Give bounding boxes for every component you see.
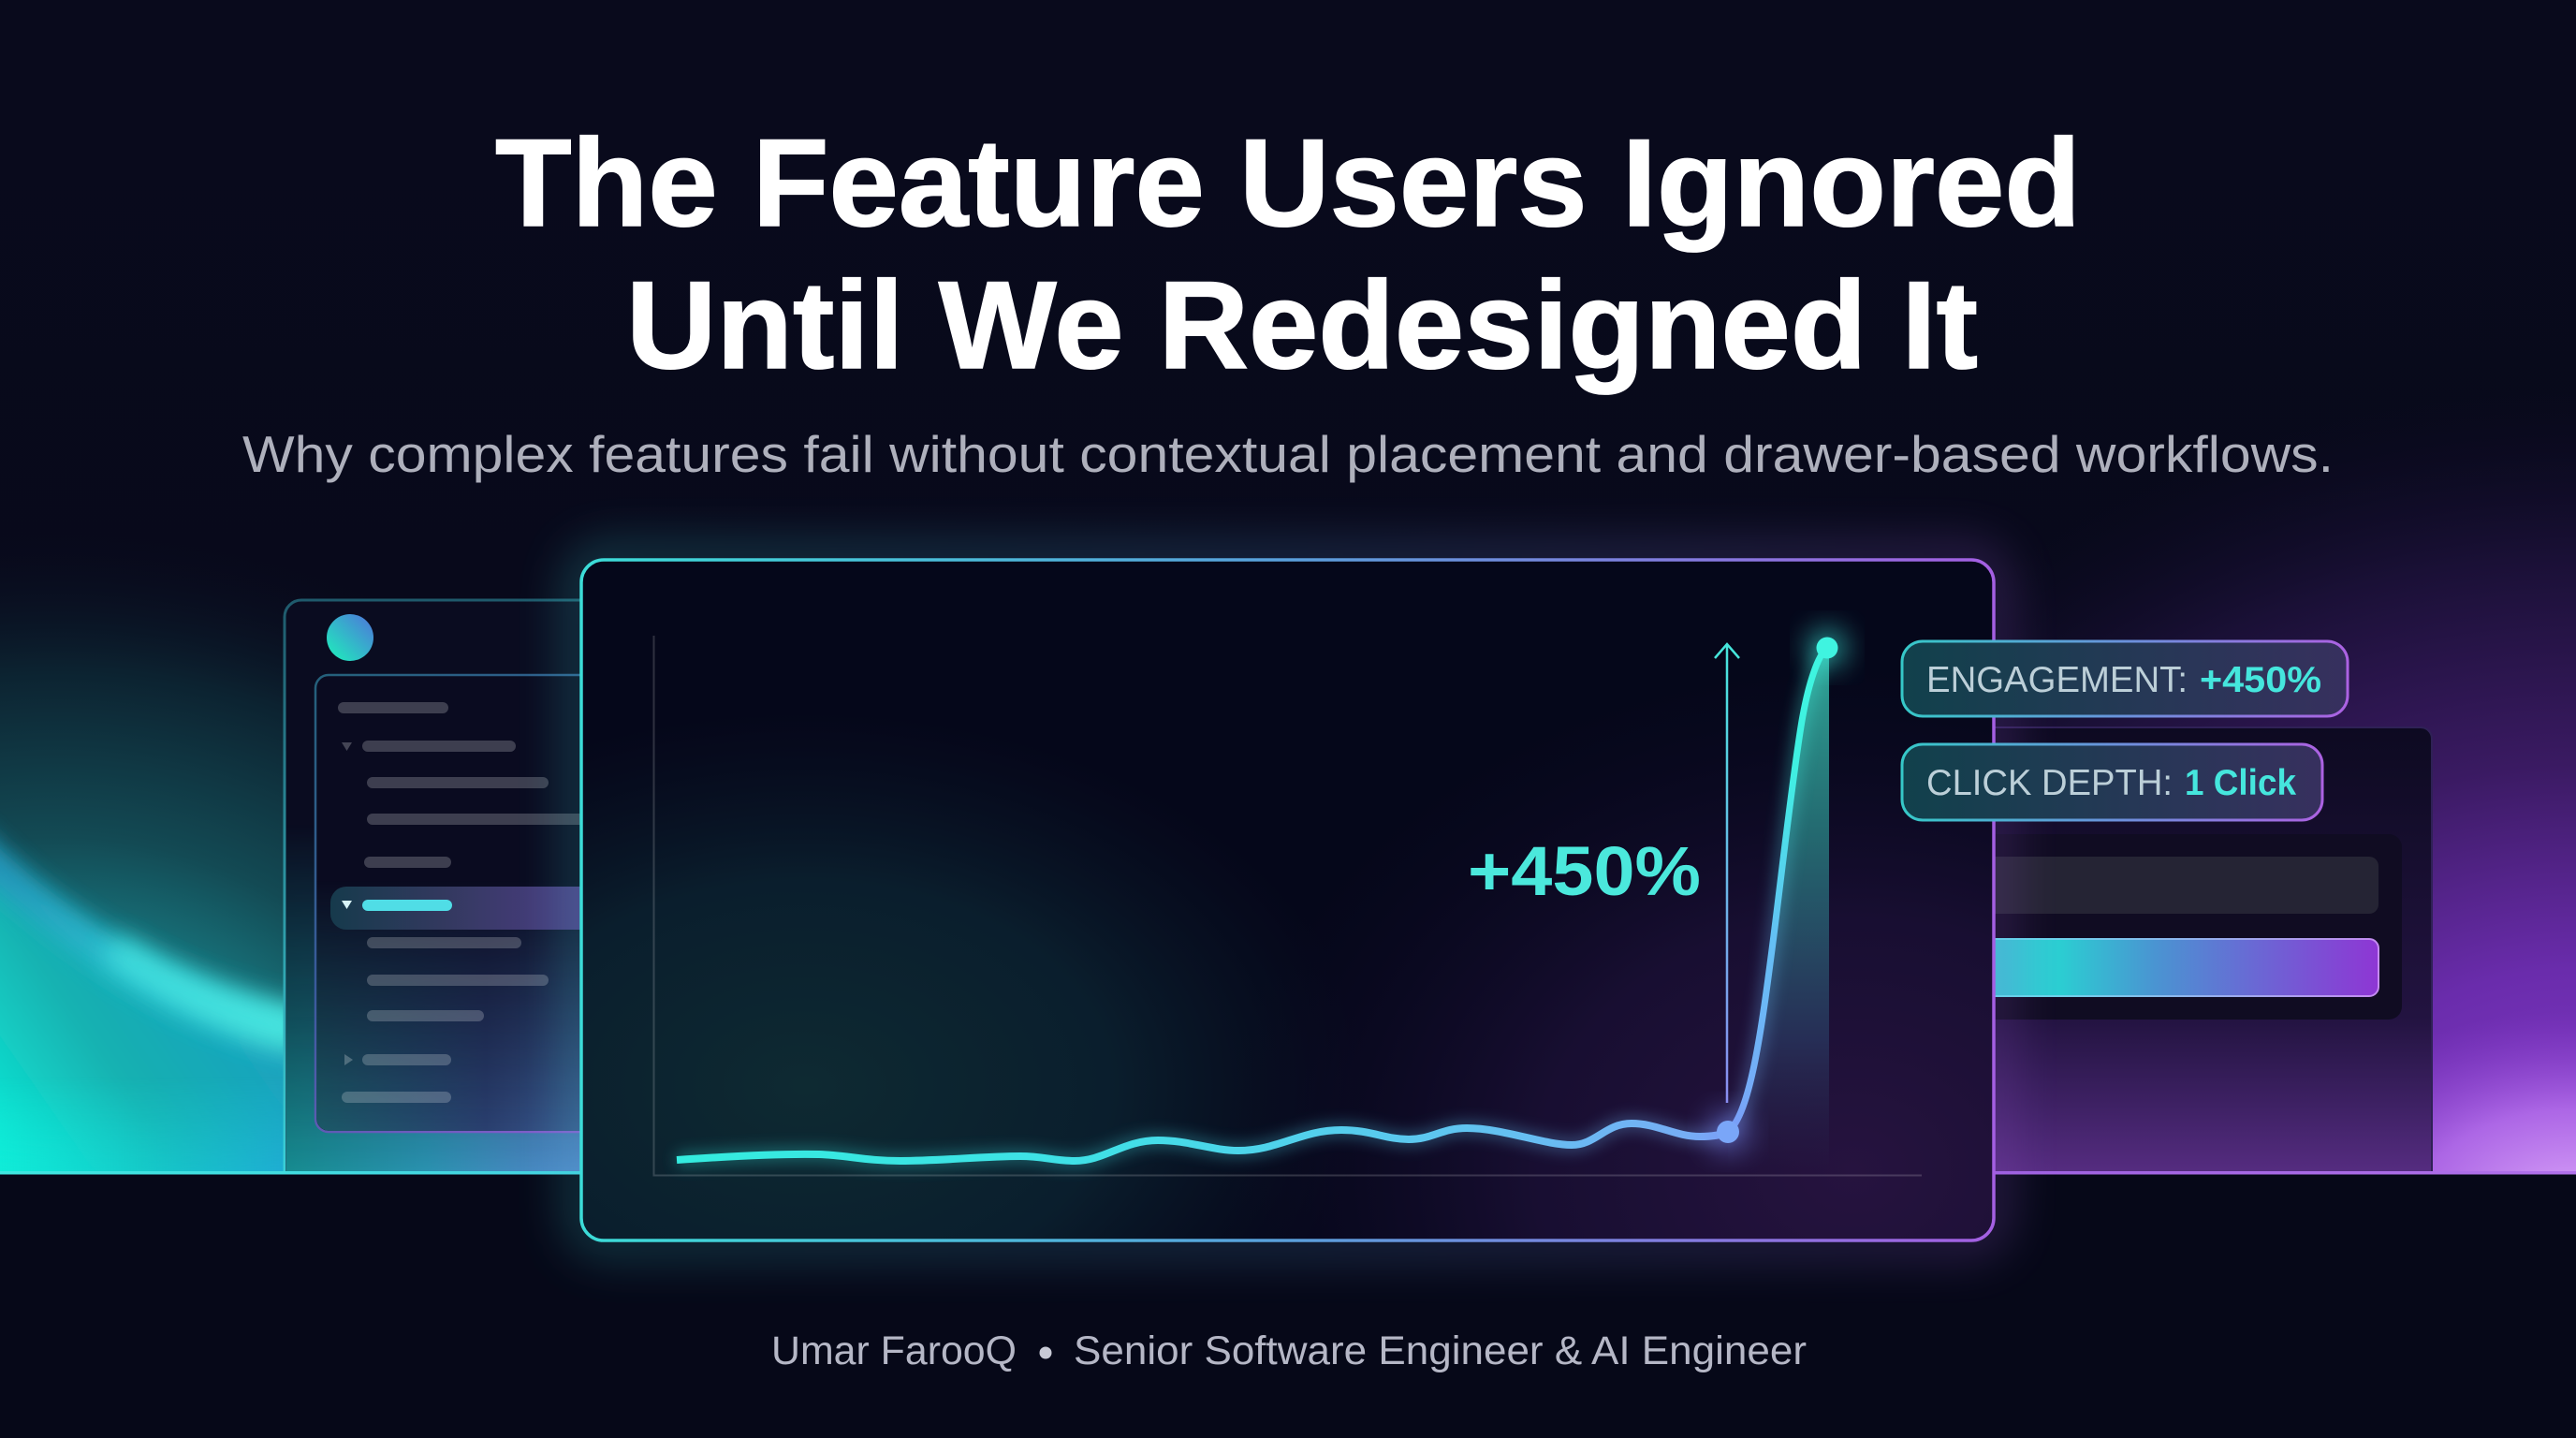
subtitle: Why complex features fail without contextual placement and drawer-based workflows. [242,425,2334,483]
horizon line [0,1171,2576,1174]
panel: main chart card [581,560,1994,1240]
card glow [581,560,1994,1240]
growth arrow [1715,644,1739,1103]
footer byline [771,1328,1807,1373]
chart [653,627,1922,1176]
title [495,114,2081,395]
tree row bars [338,702,592,1103]
drawer inner block [1966,834,2402,1020]
panel: right drawer behind main card [1966,727,2432,1172]
purple aurora glow on the right [1996,470,2576,1171]
growth value label: +450% [1468,832,1701,910]
panel: left navigation tree behind main card [283,599,580,1171]
background [0,473,2576,1171]
title: The Feature Users Ignored [495,114,2081,253]
area under spike [1728,648,1829,1170]
footer byline: Umar FarooQ [771,1328,1017,1373]
callout: click depth: 1 Click [2185,763,2296,803]
callout: click depth [1902,744,2322,820]
highlighted tree row [330,887,602,930]
callout: engagement: ENGAGEMENT: [1926,660,2188,700]
engagement curve [677,648,1827,1161]
drawer active gradient button [1966,939,2378,996]
footer byline: Senior Software Engineer & AI Engineer [1074,1328,1807,1373]
callout: engagement [1902,641,2348,716]
start point of spike [1705,1109,1750,1154]
callout: click depth: CLICK DEPTH: [1926,763,2173,803]
teal aurora glow on the left [0,605,283,1171]
icon: avatar circle [327,614,373,661]
panel: inner tree container [315,675,602,1132]
chart axes [653,636,1922,1176]
icon: collapsed and expanded tree arrows [342,742,353,1065]
drawer empty field [1966,857,2378,914]
peak point of spike [1807,627,1848,668]
callout: engagement: +450% [2200,660,2321,700]
title: Until We Redesigned It [626,257,1978,395]
